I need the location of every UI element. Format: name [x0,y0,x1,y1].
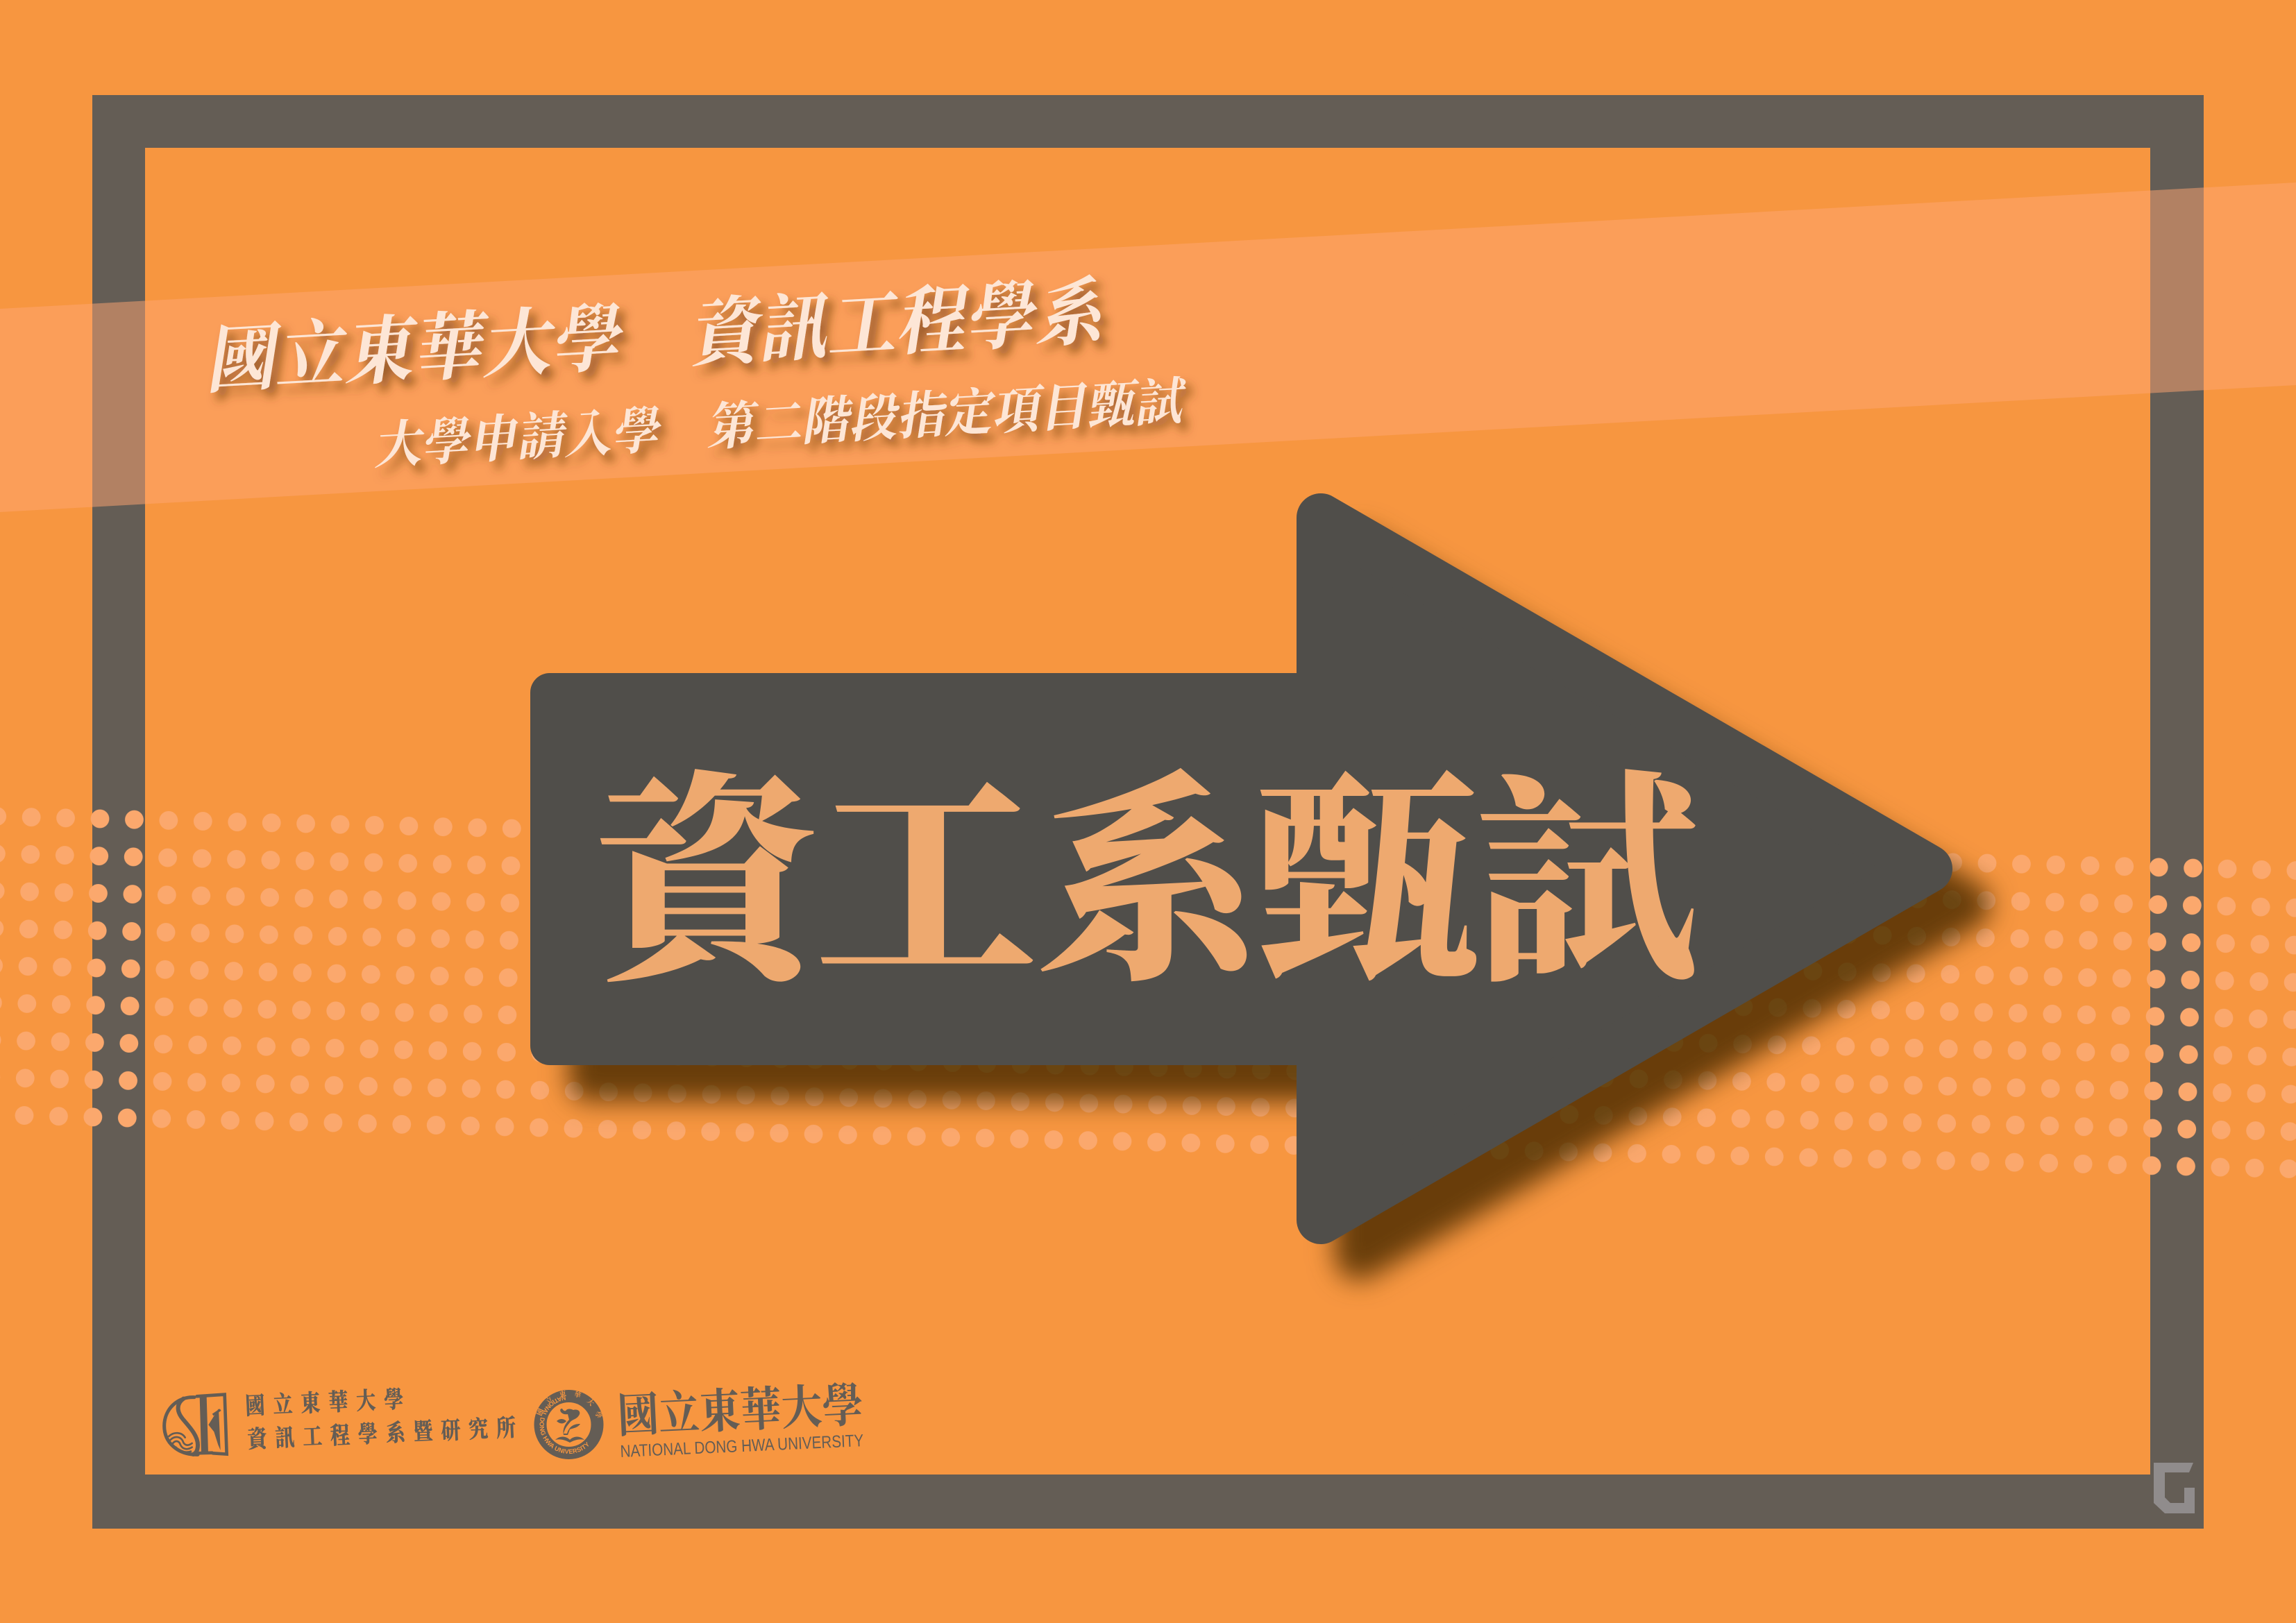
department name: 資訊工程學系暨研究所 [247,1414,525,1453]
translucent diagonal banner [0,182,2296,512]
logo: department emblem [164,1395,227,1454]
logo: university seal: 國立東華大學 [536,1391,602,1418]
arrow shadow [568,554,1966,1256]
department name: 國立東華大學 [245,1386,412,1420]
watermark G logo [2154,1463,2195,1513]
department name [245,1386,525,1453]
logo: university seal: NATIONAL DONG HWA UNIVERSITY [540,1395,589,1454]
halftone dot band [0,797,2296,1191]
logo: university seal [534,1390,604,1459]
subheading: admission stage: 大學申請入學 第二階段指定項目甄試 [372,373,1189,475]
university name logotype: 國立東華大學 [616,1379,864,1443]
university name logotype: NATIONAL DONG HWA UNIVERSITY [620,1430,864,1461]
big arrow [530,518,1928,1220]
main title: 資工系甄試 [594,761,1701,1009]
heading: university and department: 國立東華大學 資訊工程學系 [203,270,1115,403]
